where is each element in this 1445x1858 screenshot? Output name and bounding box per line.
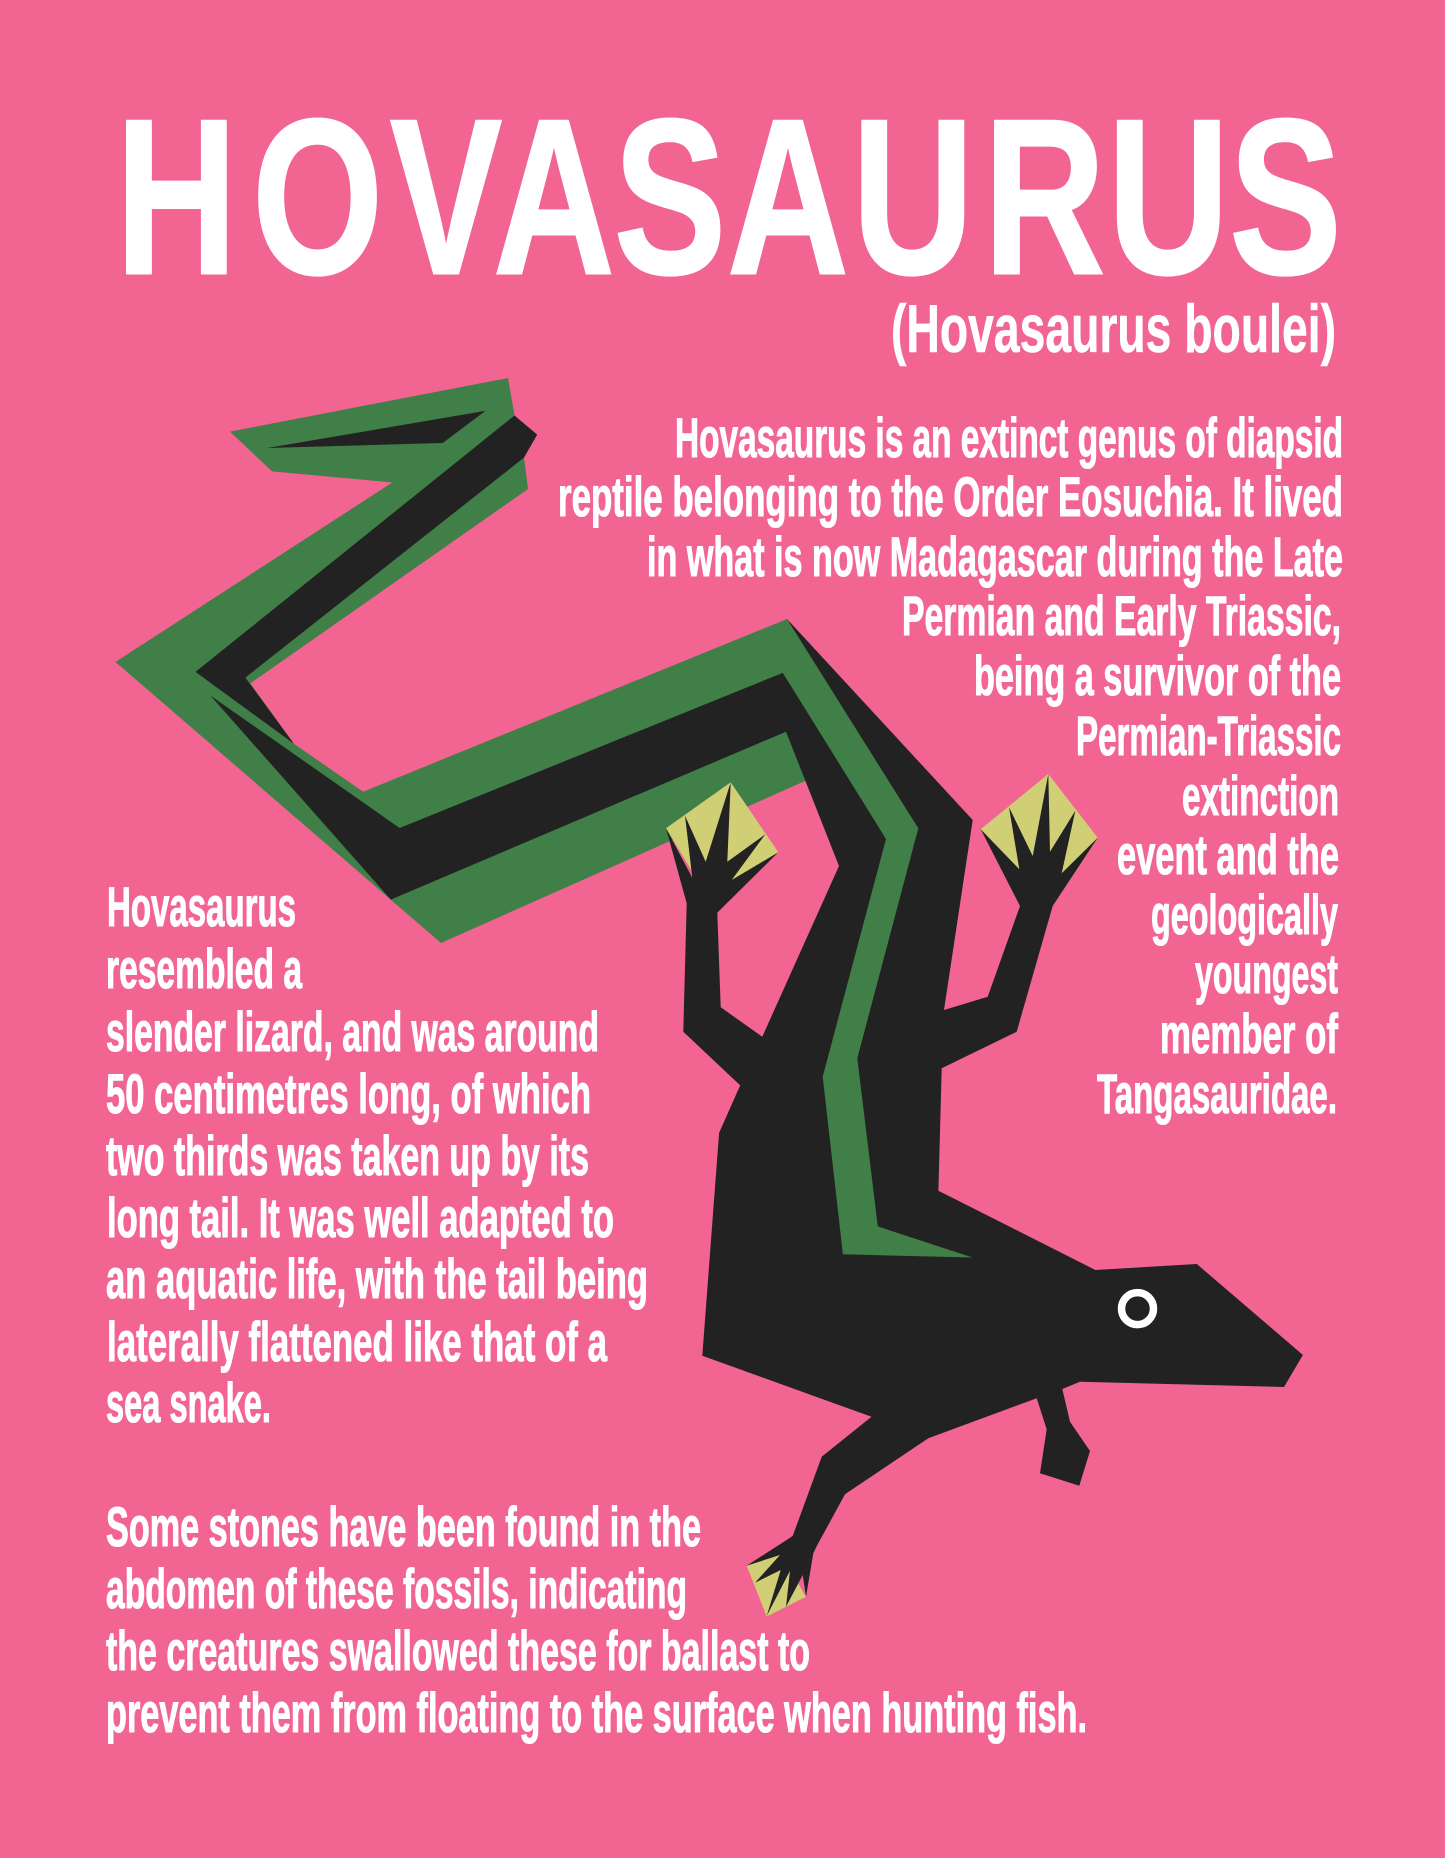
text block: stones in abdomen: the creatures swallowed these for ballast to (106, 1619, 810, 1682)
text block: right description: youngest (1195, 942, 1338, 1005)
text block: stones in abdomen: abdomen of these fossils, indicating (106, 1557, 687, 1620)
text block: left description: two thirds was taken up by its (106, 1124, 589, 1187)
text block: stones in abdomen (106, 1495, 1087, 1744)
text block: left description: resembled a (106, 937, 303, 1000)
eye (1122, 1293, 1154, 1325)
text block: right description: member of (1160, 1002, 1338, 1065)
text block: right description: extinction (1182, 764, 1339, 827)
text block: left description: Hovasaurus (107, 875, 296, 938)
text block: left description: laterally flattened like that of a (107, 1310, 608, 1373)
tail: green outer band (116, 378, 870, 943)
text block: stones in abdomen: Some stones have been found in the (106, 1495, 701, 1558)
title: HOVASAURUS (116, 73, 1342, 321)
claws: yellow backgrounds (666, 774, 1098, 1616)
body, legs, head and lower tail stripe (210, 619, 1303, 1616)
text block: left description: 50 centimetres long, of which (106, 1062, 591, 1125)
text block: left description: slender lizard, and was around (106, 1000, 599, 1063)
text block: left description: sea snake. (106, 1371, 271, 1434)
text block: left description: long tail. It was well adapted to (107, 1186, 614, 1249)
text block: right description (558, 406, 1343, 1125)
text block: left description (106, 875, 648, 1434)
text block: left description: an aquatic life, with the tail being (106, 1247, 648, 1310)
back: green stripe (770, 619, 972, 1258)
tail: black upper stripe (196, 416, 537, 744)
tail tip: black sliver (267, 411, 485, 448)
illustration: Hovasaurus (116, 378, 1303, 1616)
